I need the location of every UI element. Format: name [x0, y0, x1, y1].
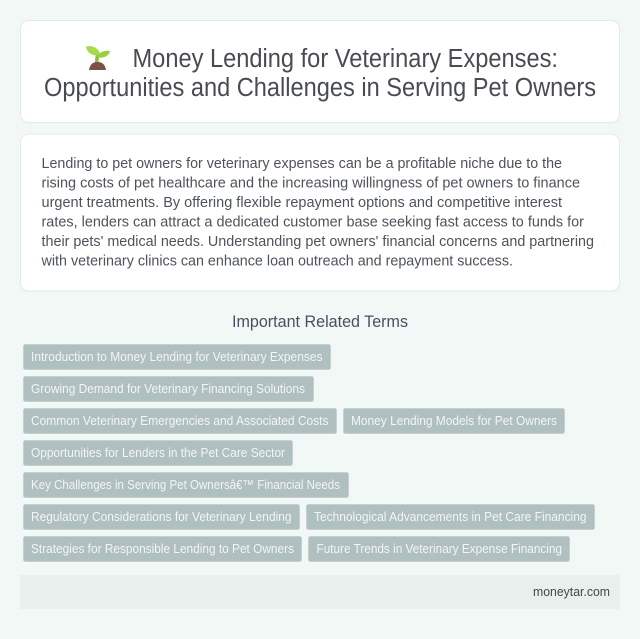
tag: Growing Demand for Veterinary Financing Solutions: [31, 381, 305, 396]
tag: Strategies for Responsible Lending to Pet Owners: [31, 541, 294, 556]
panel: intro paragraph: [20, 134, 620, 291]
title text: [44, 45, 596, 102]
tag: [24, 536, 302, 562]
tag: [24, 504, 300, 530]
tag: [344, 408, 564, 434]
panel: related term tags: [24, 344, 594, 562]
tag: [24, 472, 348, 498]
heading: important related terms: Important Related Terms: [232, 313, 408, 331]
icon: seedling: [86, 46, 110, 70]
panel: intro paragraph: their pets' medical needs. Understanding pet owners' financial concerns and partnering: [42, 233, 594, 250]
title text: Money Lending for Veterinary Expenses:: [132, 45, 558, 73]
footer: moneytar.com: [533, 585, 610, 599]
tag: [24, 344, 330, 370]
tag: [24, 376, 314, 402]
tag: Introduction to Money Lending for Veterinary Expenses: [31, 349, 322, 364]
tag: Future Trends in Veterinary Expense Financing: [316, 541, 562, 556]
tag: [308, 536, 570, 562]
panel: intro paragraph: rising costs of pet healthcare and the increasing willingness of pet owners to finance: [42, 174, 580, 192]
panel: intro paragraph: Lending to pet owners for veterinary expenses can be a profitable niche due to the: [42, 155, 562, 172]
tag: Common Veterinary Emergencies and Associated Costs: [31, 413, 328, 428]
tag: Key Challenges in Serving Pet Ownersâ€™ Financial Needs: [31, 477, 340, 492]
tag: Technological Advancements in Pet Care Financing: [314, 509, 586, 524]
panel: intro paragraph: with veterinary clinics can enhance loan outreach and repayment success.: [41, 252, 513, 270]
footer: [20, 575, 620, 609]
tag: Regulatory Considerations for Veterinary Lending: [31, 509, 292, 524]
tag: [306, 504, 594, 530]
title text: Opportunities and Challenges in Serving Pet Owners: [44, 74, 596, 102]
panel: title card: [20, 20, 620, 122]
panel: intro paragraph: rates, lenders can attract a dedicated customer base seeking fast access to funds for: [42, 214, 584, 230]
panel: intro paragraph: urgent treatments. By offering flexible repayment options and competitive interest: [42, 194, 563, 211]
tag: Money Lending Models for Pet Owners: [351, 413, 557, 428]
tag: [24, 440, 292, 466]
tag: [24, 408, 336, 434]
tag: Opportunities for Lenders in the Pet Care Sector: [31, 445, 286, 460]
